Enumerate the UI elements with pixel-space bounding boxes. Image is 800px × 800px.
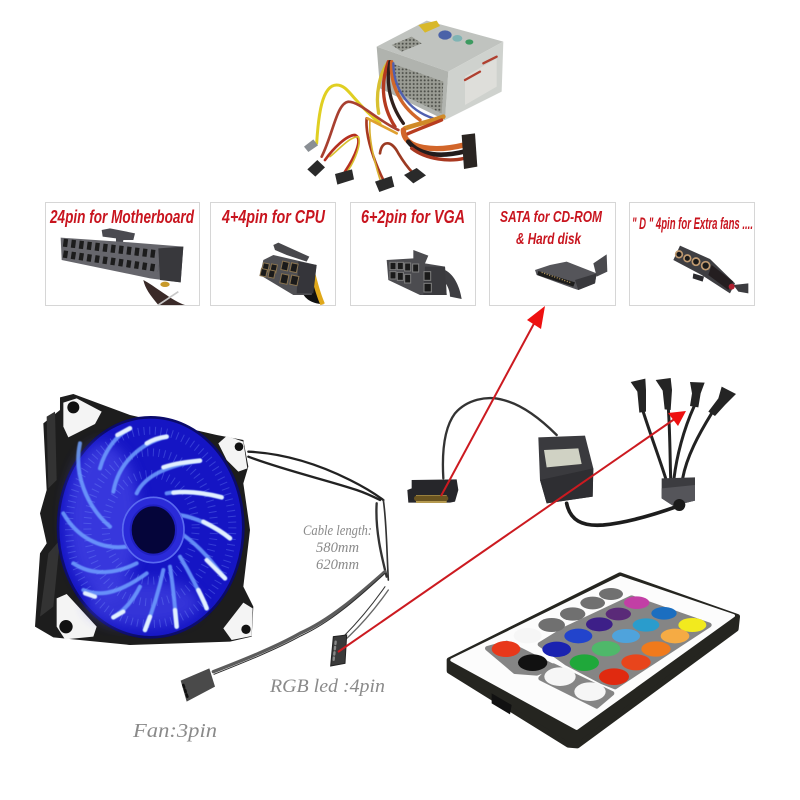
panel: 24pin for motherboard [46,202,200,306]
connector: 4+4pin [260,243,323,304]
label: 4+4pin: 4+4pin for CPU [221,207,326,227]
label: 24pin: 24pin for Motherboard [49,207,195,227]
panel: 6+2pin for VGA [350,202,476,306]
fan frame [35,394,253,645]
IR remote control [449,575,737,746]
LED blade streaks [63,428,230,630]
panel: D 4pin for extra fans [630,202,754,306]
red arrow: RGB plug to fan header [338,411,686,652]
blade texture [69,431,232,624]
connector: SATA [535,254,607,290]
label: SATA: SATA for CD-ROM [500,209,602,226]
grey top buttons [538,588,623,632]
corner mounts [57,398,253,640]
splitter leads [643,407,712,478]
mount holes [59,401,251,634]
connector: 6+2pin [387,250,462,299]
panel: SATA for CD-ROM and hard disk [490,202,616,306]
function buttons [492,628,606,701]
4-pin RGB plug [331,635,347,666]
SATA power cable and connector [407,378,736,525]
four fan plugs [631,378,736,416]
label: cable length [303,523,372,573]
connector: D 4pin [673,246,748,293]
label: cable length: 620mm [316,557,359,573]
blue rotor [58,417,243,637]
panel: 4+4pin for CPU [210,202,336,306]
button panels [487,598,709,706]
power supply unit with cables [304,21,503,192]
RGB controller box [538,436,593,503]
SATA plug [407,479,458,503]
label: RGB led 4pin: RGB led :4pin [269,676,385,697]
splitter hub [662,477,695,511]
fan cables and plugs [181,452,388,702]
colour buttons [542,596,706,685]
label: fan 3pin: Fan:3pin [132,720,217,742]
red arrow: SATA to SATA power [441,306,545,496]
label: SATA: & Hard disk [516,231,582,248]
connector: 24pin [61,228,185,305]
label: cable length: Cable length: [303,523,372,539]
3-pin fan plug [181,668,215,702]
label: 6+2pin: 6+2pin for VGA [361,207,465,227]
hub [123,497,184,563]
120mm blue LED fan [35,394,253,645]
label: SATA [500,209,602,248]
label: cable length: 580mm [316,540,359,556]
